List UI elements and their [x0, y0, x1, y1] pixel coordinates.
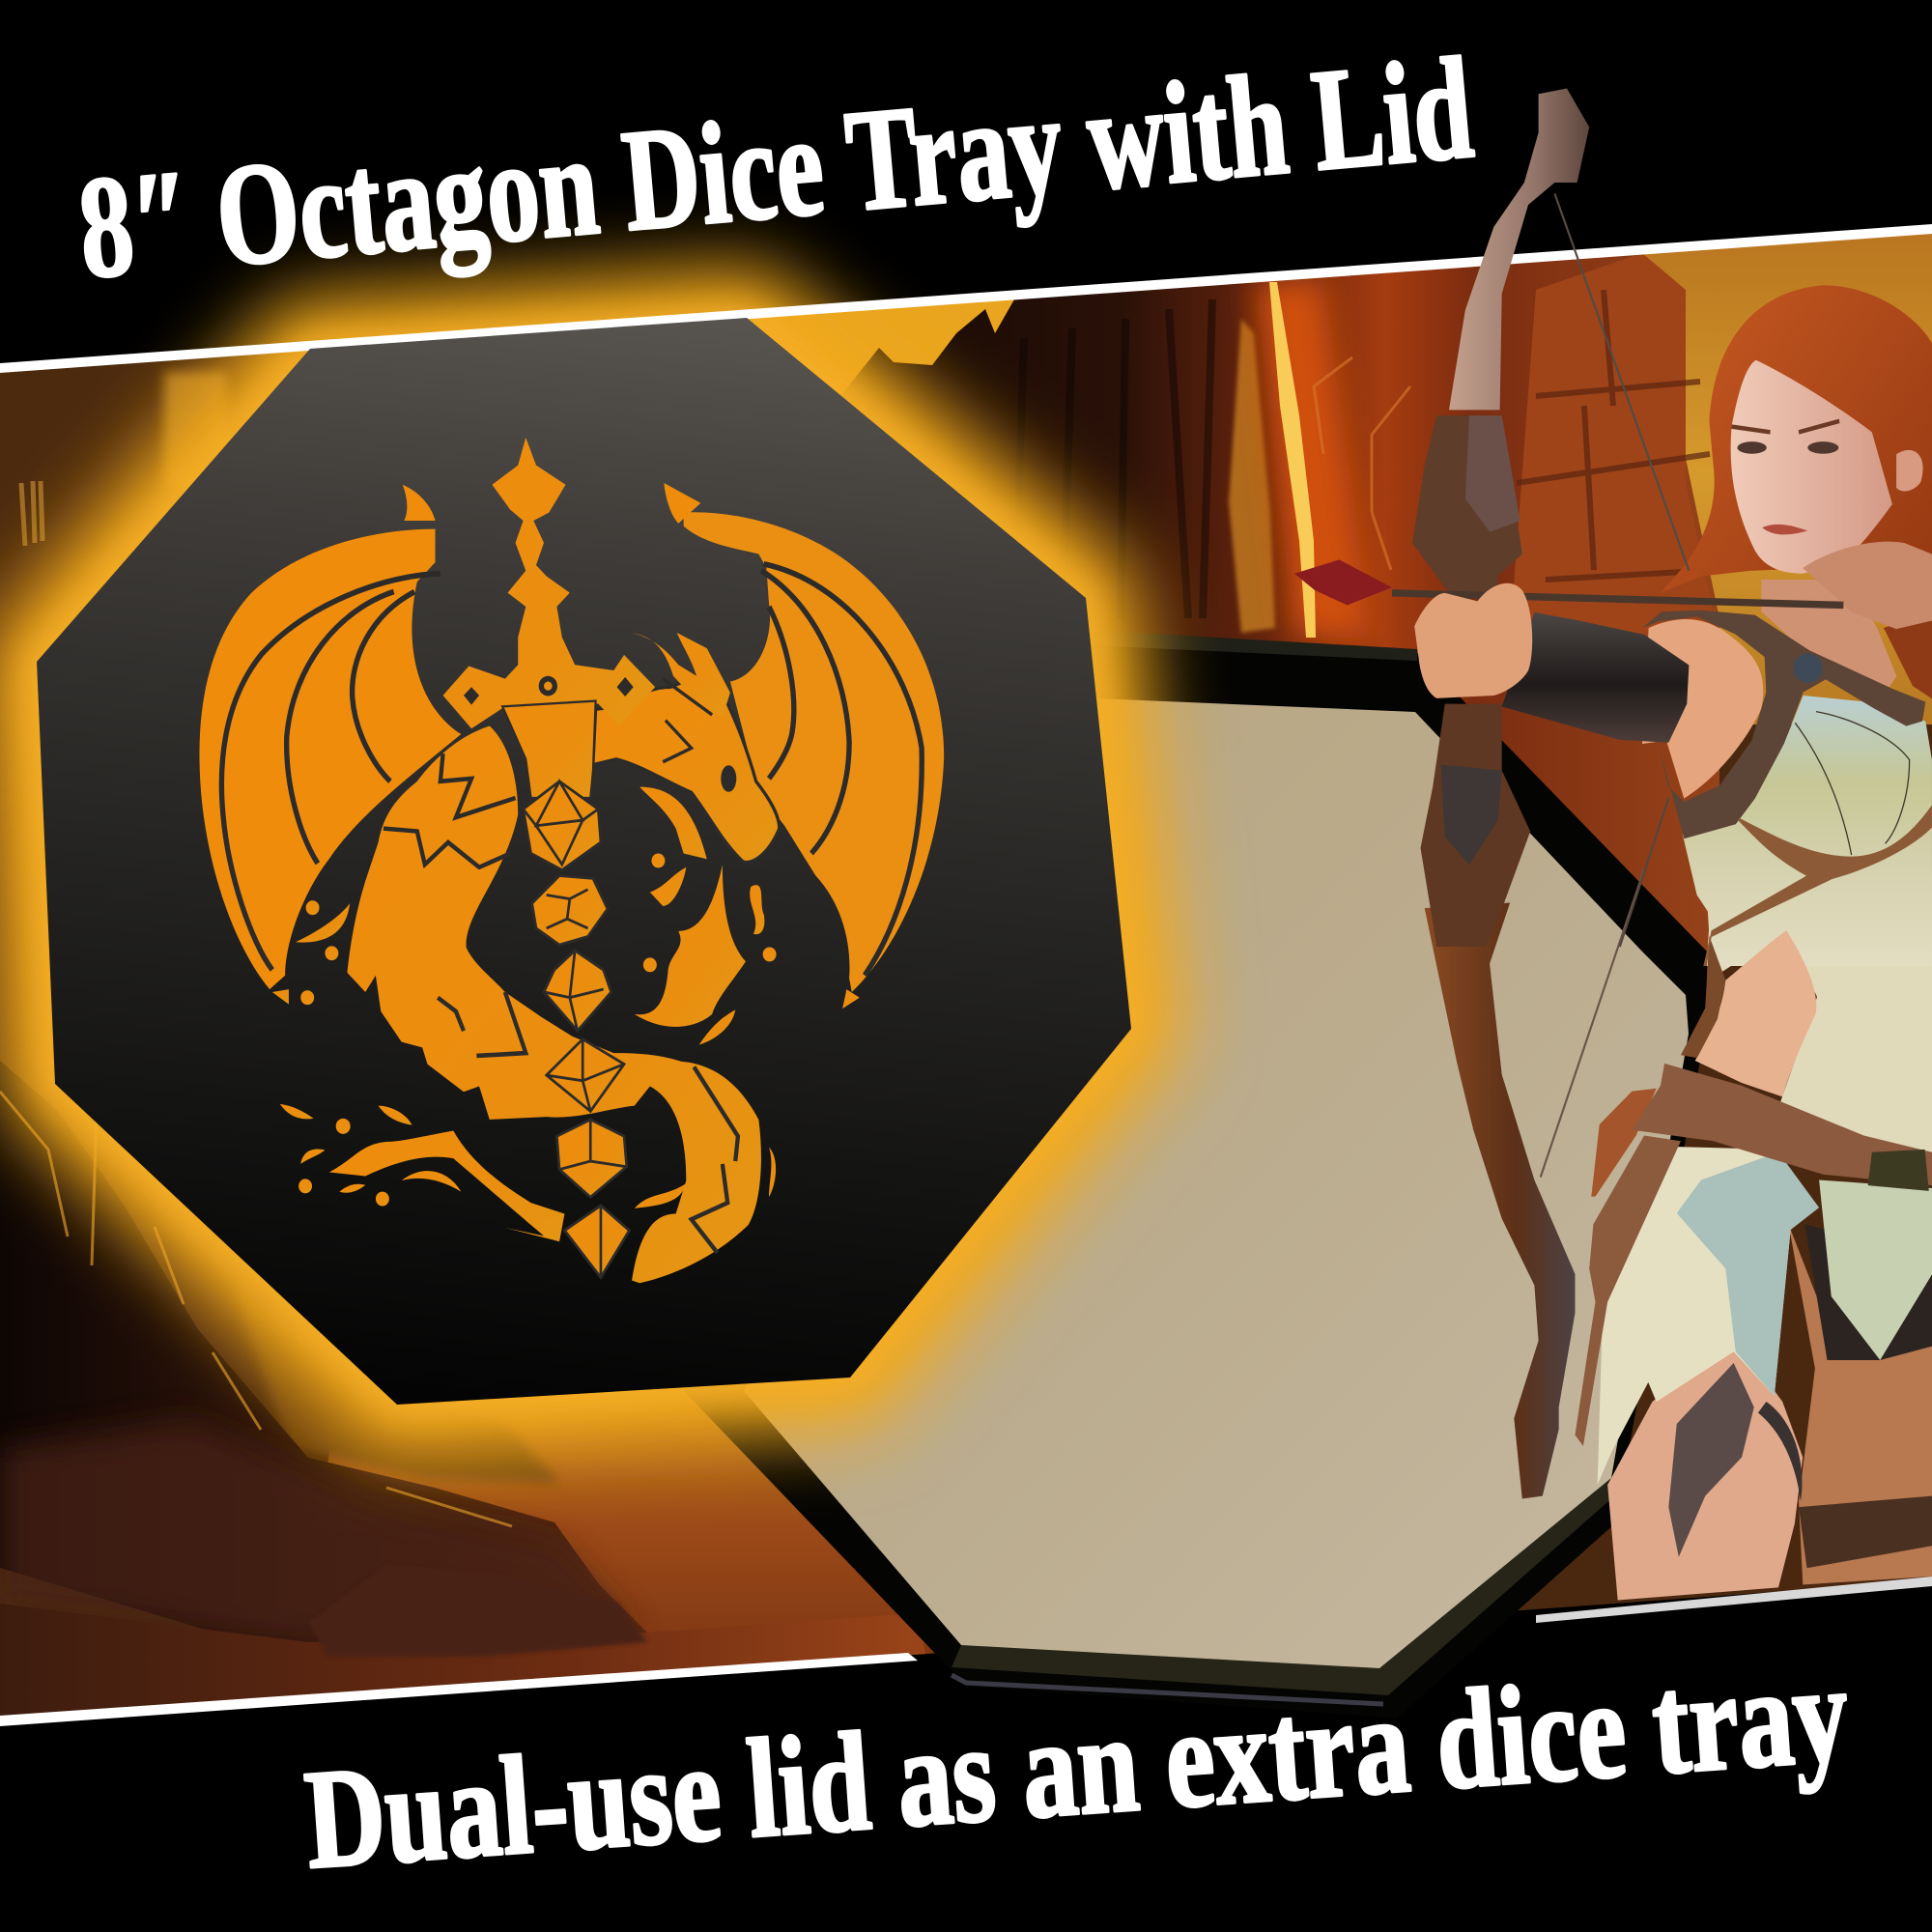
dragon breath flame: [635, 853, 777, 1044]
neck: [1761, 580, 1896, 691]
left wing: [199, 485, 461, 989]
dark underwear strap: [1758, 1402, 1802, 1501]
d8 die: [547, 1039, 624, 1111]
d4 die: [564, 1206, 629, 1278]
bow string upper: [1554, 194, 1689, 571]
skirt blue shadow: [1677, 1152, 1819, 1396]
d10 die: [544, 951, 611, 1031]
open dice tray with tan felt: [684, 630, 1707, 1719]
bow string lower: [1541, 869, 1644, 1178]
tail flame: [280, 1104, 776, 1241]
archer lower half: [1425, 869, 1932, 1601]
side strap: [1681, 936, 1725, 1058]
bow mid grip: [1421, 704, 1530, 947]
bow hand: [1414, 583, 1532, 698]
octagon dice tray lid: [37, 318, 1131, 1405]
midriff: [1695, 930, 1816, 1096]
ear: [1896, 450, 1923, 492]
lid leather surface: [37, 318, 1131, 1405]
dragon head: [593, 633, 780, 863]
dice column: [524, 781, 629, 1278]
dragon body: [347, 725, 761, 1283]
bracer: [1502, 612, 1689, 743]
bow string lower: [1620, 798, 1668, 947]
arrow shaft: [1392, 593, 1843, 605]
tray black outer shell: [684, 630, 1707, 1719]
belt: [1632, 1064, 1932, 1185]
foreground sand: [0, 1604, 927, 1729]
bow upper limb: [1449, 88, 1589, 410]
right wing: [664, 483, 944, 992]
buckle: [1868, 1150, 1929, 1191]
brown sash: [1575, 1136, 1681, 1446]
hanging pouch tassel: [1591, 1089, 1657, 1197]
dark shorts: [1804, 1224, 1932, 1360]
left cliff wall: [19, 363, 232, 547]
bodice: [1683, 696, 1932, 966]
skirt cream: [1598, 1147, 1791, 1485]
sandy floor: [328, 1400, 935, 1656]
harness button: [1794, 654, 1823, 683]
arrow head: [1294, 559, 1392, 605]
foreground rock heap: [309, 1565, 647, 1657]
red-brown rock slope: [0, 1420, 638, 1642]
dragon, sword and dice emblem: [199, 438, 944, 1283]
rock tower: [1514, 255, 1714, 638]
sky right: [1642, 222, 1932, 724]
tray inner bevel: [952, 1478, 1615, 1695]
front panel: [1819, 1179, 1932, 1360]
thigh strap: [1799, 1496, 1932, 1568]
orange glow around lid: [37, 318, 1131, 1405]
archer upper half: [1412, 88, 1932, 947]
waist and belt: [1632, 930, 1932, 1191]
face: [1731, 360, 1892, 574]
archer woman with bow: [1294, 88, 1932, 1601]
dark cliff foreground: [0, 1061, 647, 1661]
bow grip armour: [1412, 415, 1522, 593]
top white divider line: [0, 224, 1932, 373]
tray lower edge seam: [952, 1675, 1383, 1704]
torso detail: [1642, 580, 1932, 966]
d6 die: [556, 1120, 627, 1197]
lit rock edges: [0, 1092, 512, 1526]
tray back rim highlight: [1088, 630, 1417, 661]
rock tower ledges: [1517, 290, 1719, 580]
eyes and lips: [1732, 421, 1839, 534]
bottom white divider line: [0, 1653, 918, 1726]
bodice seam lines: [1795, 712, 1910, 855]
left thigh: [1607, 1347, 1803, 1601]
sword: [443, 438, 655, 798]
bodice lower: [1705, 869, 1932, 1169]
upper arm: [1642, 619, 1763, 799]
arrow and forearm: [1294, 542, 1932, 743]
far hill: [245, 1310, 560, 1488]
background scene: volcanic landscape: [0, 222, 1932, 1729]
bow lower limb: [1425, 902, 1575, 1498]
bottom right divider line: [1536, 1577, 1932, 1623]
tan felt lining: [744, 698, 1689, 1668]
amber sky left of rock: [753, 299, 1014, 388]
thigh holster: [1668, 1363, 1754, 1557]
d12 die: [532, 875, 608, 945]
d20 die: [524, 781, 601, 870]
harness: [1642, 611, 1925, 838]
left sparks: [272, 900, 860, 1009]
gold rock patch: [1229, 319, 1275, 633]
lava stream: [1256, 280, 1372, 638]
central rock wall: [840, 253, 1719, 976]
under bust strap: [1703, 805, 1932, 966]
hair back: [1661, 285, 1932, 682]
rock wall cracks: [1314, 357, 1410, 570]
drawing hand: [1803, 542, 1932, 629]
sword grip: [502, 701, 596, 798]
hair right side: [1884, 611, 1932, 698]
right leg: [1789, 1224, 1932, 1584]
